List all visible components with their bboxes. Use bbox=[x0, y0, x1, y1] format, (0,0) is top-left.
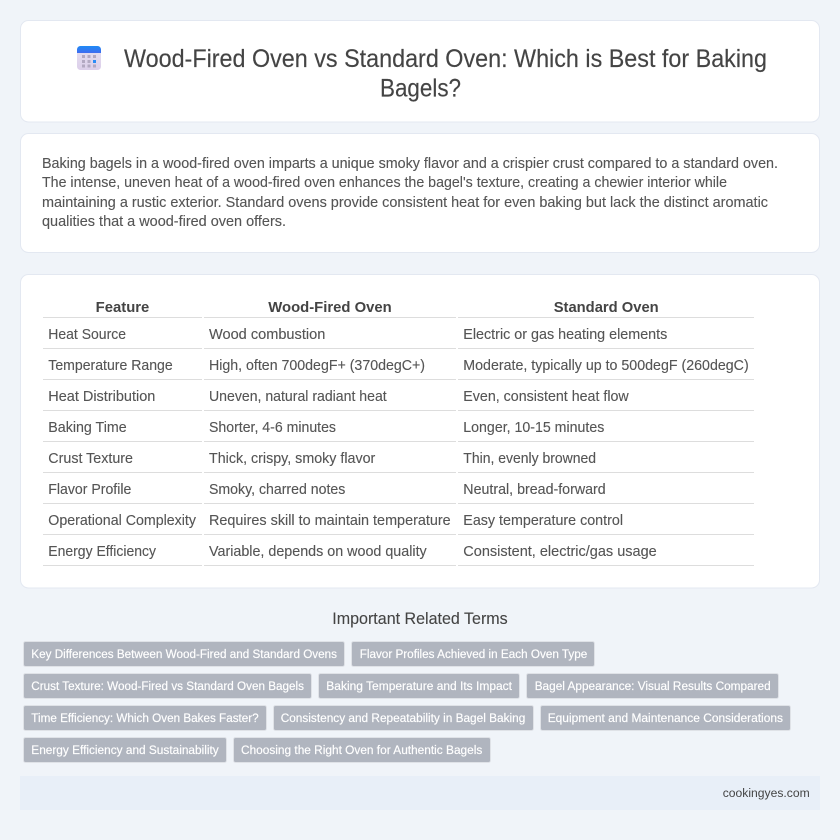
row: temperature range: Moderate, typically up to 500degF (260degC) bbox=[463, 358, 749, 374]
tag: Key Differences Between Wood-Fired and Standard Ovens bbox=[31, 647, 337, 661]
row: energy efficiency bbox=[48, 544, 657, 560]
tag: Choosing the Right Oven for Authentic Bagels bbox=[241, 743, 482, 757]
text block: intro: qualities that a wood-fired oven offers. bbox=[42, 214, 286, 230]
row: baking time: Shorter, 4-6 minutes bbox=[209, 420, 336, 436]
tag bbox=[24, 642, 344, 666]
row: flavor profile: Neutral, bread-forward bbox=[463, 482, 606, 498]
icon: calendar bbox=[77, 46, 101, 70]
table header: Wood-Fired Oven bbox=[268, 300, 392, 316]
tag: Baking Temperature and Its Impact bbox=[326, 679, 513, 693]
row: heat source: Wood combustion bbox=[209, 327, 325, 343]
text block: intro bbox=[42, 156, 778, 230]
tag: Equipment and Maintenance Considerations bbox=[548, 711, 783, 725]
tag bbox=[234, 738, 490, 762]
text block: intro: maintaining a rustic exterior. Standard ovens provide consistent heat for even baking but lack the distinct aromatic bbox=[42, 195, 768, 211]
panel: intro paragraph bbox=[20, 134, 820, 252]
row: temperature range: High, often 700degF+ (370degC+) bbox=[209, 358, 425, 374]
title: Bagels? bbox=[380, 74, 461, 102]
text block: intro: Baking bagels in a wood-fired oven imparts a unique smoky flavor and a crispier crust compared to a standard oven. bbox=[42, 156, 778, 172]
row: heat source: Electric or gas heating elements bbox=[463, 327, 667, 343]
row: flavor profile: Smoky, charred notes bbox=[209, 482, 345, 498]
row: temperature range: Temperature Range bbox=[48, 358, 173, 374]
text block: intro: The intense, uneven heat of a wood-fired oven enhances the bagel's texture, creating a chewier interior while bbox=[42, 175, 727, 191]
row: operational complexity: Easy temperature control bbox=[463, 513, 623, 529]
row: heat distribution: Uneven, natural radiant heat bbox=[209, 389, 387, 405]
panel: comparison table bbox=[20, 274, 820, 588]
row: flavor profile: Flavor Profile bbox=[48, 482, 131, 498]
tag bbox=[526, 674, 778, 698]
row: operational complexity bbox=[48, 513, 623, 529]
row: crust texture: Thin, evenly browned bbox=[463, 451, 596, 467]
tag: Consistency and Repeatability in Bagel Baking bbox=[281, 711, 525, 725]
tag: Energy Efficiency and Sustainability bbox=[31, 743, 220, 757]
table header: Standard Oven bbox=[554, 300, 659, 316]
row: heat distribution: Even, consistent heat flow bbox=[463, 389, 629, 405]
row: baking time: Longer, 10-15 minutes bbox=[463, 420, 604, 436]
row: crust texture: Thick, crispy, smoky flavor bbox=[209, 451, 375, 467]
row: operational complexity: Requires skill to maintain temperature bbox=[209, 513, 451, 529]
row: heat distribution bbox=[48, 389, 629, 405]
row: energy efficiency: Consistent, electric/gas usage bbox=[463, 544, 657, 560]
row: flavor profile bbox=[48, 482, 606, 498]
panel: title header bbox=[20, 20, 820, 122]
row: baking time: Baking Time bbox=[48, 420, 127, 436]
row: heat distribution: Heat Distribution bbox=[48, 389, 155, 405]
tag bbox=[540, 706, 790, 730]
table header bbox=[96, 300, 659, 316]
row: crust texture bbox=[48, 451, 596, 467]
tag bbox=[352, 642, 594, 666]
row: operational complexity: Operational Complexity bbox=[48, 513, 197, 529]
row: energy efficiency: Variable, depends on wood quality bbox=[209, 544, 427, 560]
heading: related terms: Important Related Terms bbox=[332, 610, 508, 628]
row: energy efficiency: Energy Efficiency bbox=[48, 544, 157, 560]
footer: cookingyes.com bbox=[723, 786, 810, 800]
row: crust texture: Crust Texture bbox=[48, 451, 133, 467]
title bbox=[124, 45, 767, 102]
tag bbox=[24, 706, 266, 730]
tag: Time Efficiency: Which Oven Bakes Faster? bbox=[31, 711, 259, 725]
table header: Feature bbox=[96, 300, 149, 316]
tag: Crust Texture: Wood-Fired vs Standard Oven Bagels bbox=[31, 679, 304, 693]
row: heat source bbox=[48, 327, 667, 343]
footer bbox=[20, 776, 820, 810]
tag bbox=[24, 674, 312, 698]
tag bbox=[274, 706, 534, 730]
tag cloud: related terms bbox=[24, 642, 790, 762]
tag bbox=[24, 738, 226, 762]
row: baking time bbox=[48, 420, 604, 436]
row: temperature range bbox=[48, 358, 749, 374]
row: heat source: Heat Source bbox=[48, 327, 126, 343]
title: Wood-Fired Oven vs Standard Oven: Which is Best for Baking bbox=[124, 45, 767, 73]
tag bbox=[318, 674, 520, 698]
tag: Flavor Profiles Achieved in Each Oven Type bbox=[360, 647, 588, 661]
tag: Bagel Appearance: Visual Results Compared bbox=[535, 679, 771, 693]
